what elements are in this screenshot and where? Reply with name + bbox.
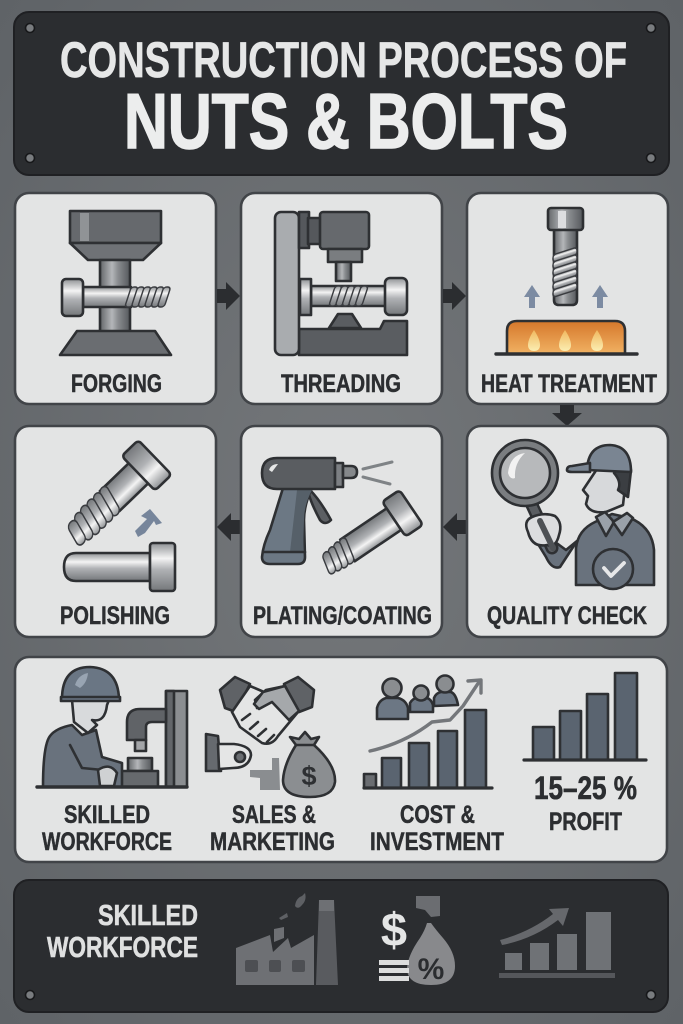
icon: spray lines (363, 462, 392, 484)
icon: inspector with magnifier (492, 440, 654, 589)
label: polishing: POLISHING (60, 602, 170, 630)
label: skilled workforce: WORKFORCE (47, 932, 198, 964)
icon: percent glyph: % (418, 953, 444, 986)
arrow: threading to heat treatment (443, 282, 466, 310)
label: sales and marketing: MARKETING (210, 828, 335, 856)
icon: heat treatment (496, 208, 637, 354)
panel: threading (241, 193, 442, 404)
icon: threading machine (275, 212, 407, 355)
label: threading: THREADING (281, 370, 401, 398)
label: skilled workforce (47, 900, 198, 964)
label: cost and investment (370, 801, 504, 856)
icon: polish direction arrow (135, 509, 162, 537)
icon: dollar sign: $ (301, 761, 317, 791)
label: skilled workforce: SKILLED (98, 900, 198, 932)
icon: handshake and money bag (206, 677, 335, 797)
label: skilled workforce (42, 801, 172, 856)
panel: heat treatment (467, 193, 668, 404)
chart: profit bars (524, 673, 646, 760)
label: cost and investment: COST & (400, 801, 475, 829)
icon: team and growth bars (364, 676, 492, 788)
arrow: polishing from plating (217, 513, 240, 541)
icon: dollar glyph: $ (381, 903, 407, 956)
arrow: plating from quality check (443, 513, 466, 541)
icon: growth trend arrow (370, 680, 481, 751)
label: plating and coating: PLATING/COATING (253, 602, 432, 630)
panel: polishing (15, 426, 216, 637)
icon: rising bar chart (499, 908, 615, 978)
label: cost and investment: INVESTMENT (370, 828, 504, 856)
label: profit: PROFIT (549, 808, 622, 836)
label: forging: FORGING (71, 370, 162, 398)
arrow: forging to threading (217, 282, 240, 310)
icon: polished bolts (54, 440, 175, 591)
title line 2: NUTS & BOLTS (124, 77, 568, 165)
stat: profit margin: 15–25 % (534, 770, 637, 806)
label: sales and marketing: SALES & (232, 801, 316, 829)
icon: rising heat arrows (524, 285, 608, 308)
icon: coated bolt (312, 490, 423, 584)
arrow: heat treatment to quality check (552, 405, 582, 426)
icon: factory (236, 893, 338, 985)
label: skilled workforce: WORKFORCE (42, 828, 172, 856)
title banner (14, 12, 669, 175)
panel: plating and coating (241, 426, 442, 637)
panel: forging (15, 193, 216, 404)
label: sales and marketing (210, 801, 335, 856)
icon: spray gun (262, 458, 357, 564)
label: skilled workforce: SKILLED (64, 801, 150, 829)
panel: business factors (15, 657, 667, 862)
panel: footer band (14, 880, 668, 1012)
panel: quality check (467, 426, 668, 637)
icon: skilled worker at machine (37, 667, 187, 787)
icon: money and percent bag (379, 896, 455, 985)
icon: forging press (60, 211, 171, 355)
